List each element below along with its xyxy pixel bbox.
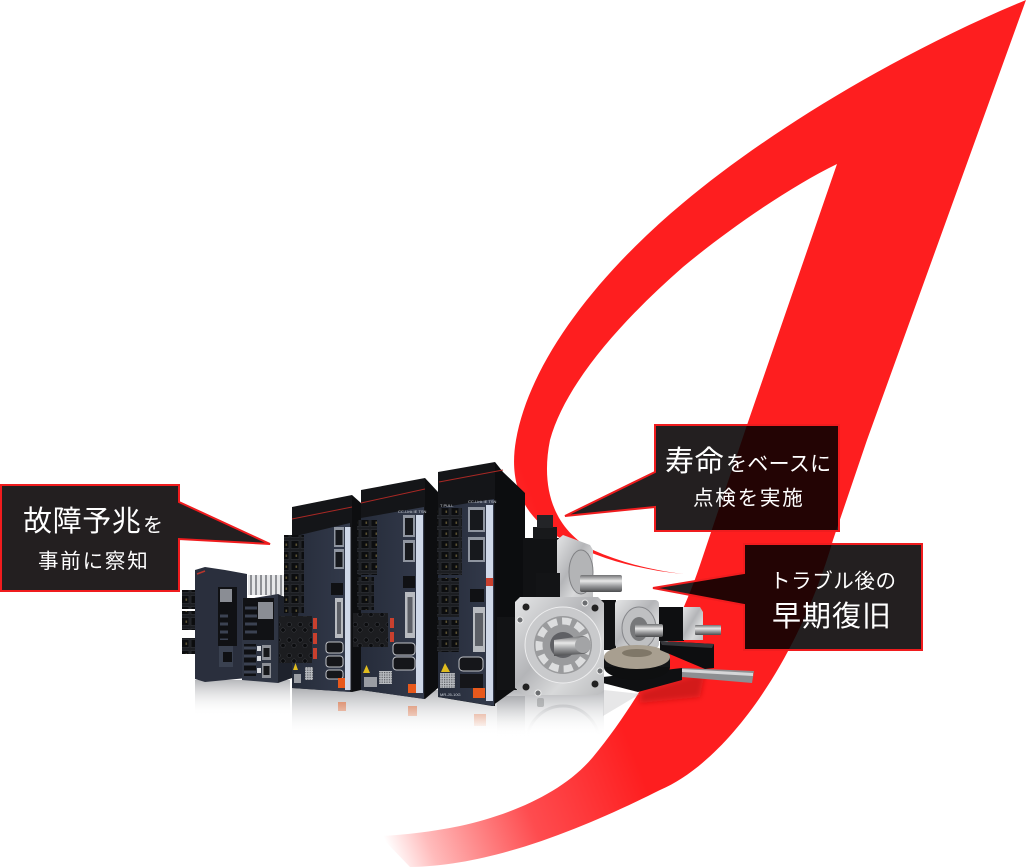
compact unit left	[182, 567, 284, 682]
rear servo motor	[523, 515, 622, 600]
callout: early recovery	[653, 544, 922, 650]
red swoosh	[380, 0, 1026, 867]
callout text: failure prediction: 事前に察知	[38, 550, 150, 573]
callout text: early recovery: 早期復旧	[772, 600, 892, 633]
servo amplifier 3: CC-Link IE TSN	[468, 499, 496, 504]
table shadow on swoosh	[640, 672, 705, 703]
servo amplifier 3: T PULL	[440, 503, 454, 508]
front servo motor	[497, 597, 604, 696]
callout: failure prediction	[1, 485, 270, 591]
servo amplifier 2	[353, 478, 438, 699]
servo amplifier 3	[437, 462, 525, 706]
linear rail	[660, 641, 754, 683]
rotary table	[603, 645, 682, 692]
callout: lifetime based inspection	[565, 425, 839, 531]
compact unit right	[242, 594, 292, 683]
product group	[182, 462, 754, 706]
product reflection	[195, 680, 640, 778]
rear right servo motors	[598, 600, 721, 650]
callout text: early recovery: トラブル後の	[770, 569, 897, 593]
callout text: lifetime based inspection: 寿命	[665, 445, 724, 478]
callout text: lifetime based inspection: をベースに	[726, 453, 831, 476]
callout text: lifetime based inspection: 点検を実施	[693, 487, 804, 510]
callout text: failure prediction: 故障予兆	[23, 505, 141, 538]
servo amplifier 1	[279, 495, 361, 692]
servo amplifier 2: CC-Link IE TSN	[398, 509, 426, 514]
servo amplifier 3: MR-J5-10G	[440, 692, 461, 697]
callout text: failure prediction: を	[143, 515, 163, 537]
